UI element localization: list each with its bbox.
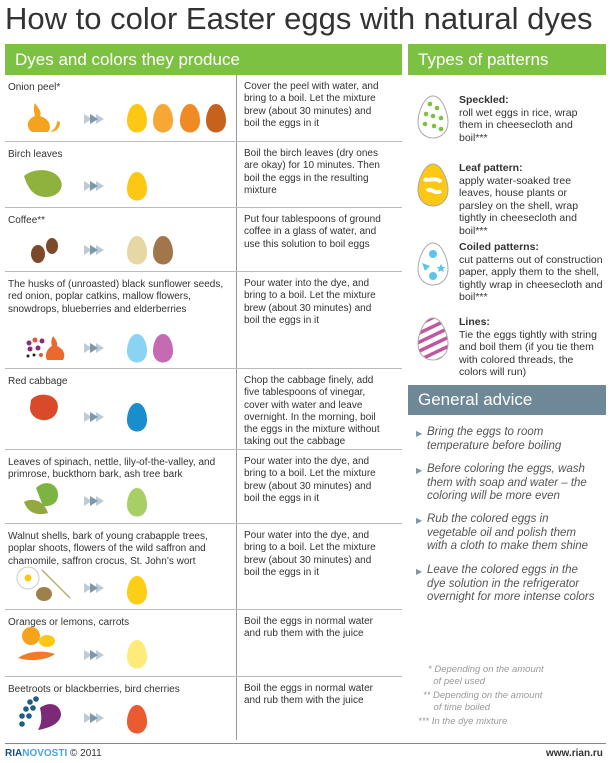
row: red cabbage — [5, 369, 402, 450]
pattern: coiled: Coiled patterns: — [459, 241, 539, 253]
pattern: leaf — [418, 162, 578, 236]
advice 2: ▶ — [416, 466, 422, 475]
row: onion: Onion peel* — [8, 82, 60, 93]
advice 2: Before coloring the eggs, wash them with soap and water – the coloring will be more even — [427, 463, 587, 502]
egg: spinach — [127, 488, 147, 516]
eggs: husks — [127, 334, 173, 362]
footnotes: * Depending on the amount — [428, 664, 544, 675]
pattern: lines — [418, 316, 597, 378]
footnotes: ** Depending on the amount — [423, 690, 542, 701]
row: birch — [5, 142, 402, 208]
advice 4: Leave the colored eggs in the dye solution in the refrigerator overnight for more intense colors — [427, 564, 594, 603]
arrows — [84, 114, 104, 124]
row: walnut: Walnut shells, bark of young crabapple trees, poplar shoots, flowers of the wild saffron and chamomile, saffron crocus, St. John’s wort — [8, 531, 208, 567]
row: red cabbage: Red cabbage — [8, 376, 68, 387]
row: husks — [5, 272, 402, 369]
row: spinach: Leaves of spinach, nettle, lily-of-the-valley, and primrose, buckthorn bark, ash tree bark — [8, 457, 215, 480]
row: red cabbage: Chop the cabbage finely, add five tablespoons of vinegar, cover with water and leave overnight. In the morning, boil the eggs in the mixture without taking out the cabbage — [244, 375, 380, 447]
pattern: coiled — [418, 241, 603, 303]
row: onion — [5, 75, 402, 142]
footnotes: of peel used — [433, 676, 485, 687]
pattern: leaf: Leaf pattern: — [459, 162, 523, 174]
row: spinach: Pour water into the dye, and bring to a boil. Let the mixture brew (about 30 minutes) and boil the eggs in it — [244, 456, 376, 504]
eggs: onion — [127, 104, 226, 132]
advice 3: ▶ — [416, 516, 422, 525]
row: beetroots: Beetroots or blackberries, bird cherries — [8, 684, 180, 695]
egg: red cabbage — [127, 403, 147, 432]
pattern: lines: Lines: — [459, 316, 490, 328]
row: walnut: Pour water into the dye, and bring to a boil. Let the mixture brew (about 30 minutes) and boil the eggs in it — [244, 530, 376, 578]
row: coffee: Coffee** — [8, 215, 45, 226]
footer rule — [5, 743, 606, 744]
icon: oranges & carrot — [18, 627, 55, 660]
advice 1: ▶ — [416, 429, 422, 438]
icon: berries — [26, 336, 64, 360]
advice 3: Rub the colored eggs in vegetable oil and polish them with a cloth to make them shine — [427, 513, 588, 552]
heading: advice: General advice — [418, 390, 532, 409]
icon: spinach — [24, 483, 58, 514]
row: oranges: Boil the eggs in normal water and rub them with the juice — [244, 616, 373, 639]
panel: patterns — [408, 44, 606, 378]
heading: dyes: Dyes and colors they produce — [15, 50, 240, 69]
icon: coffee beans — [31, 238, 58, 263]
row: beetroots — [8, 683, 373, 706]
row: oranges — [5, 610, 402, 677]
icon: onion — [28, 103, 60, 132]
column divider — [236, 75, 237, 740]
row: walnut — [5, 524, 402, 610]
pattern: speckled: Speckled: — [459, 94, 509, 106]
footnotes: of time boiled — [434, 702, 490, 713]
title: How to color Easter eggs with natural dyes — [5, 1, 593, 36]
row: husks: The husks of (unroasted) black sunflower seeds, red onion, poplar catkins, mallow flowers, snowdrops, blueberries and elderberries — [8, 279, 223, 315]
eggs: coffee — [127, 236, 173, 264]
pattern: coiled: cut patterns out of construction paper, apply them to the shell, tightly wrap in cheesecloth and boil*** — [459, 254, 603, 303]
row: onion: Cover the peel with water, and bring to a boil. Let the mixture brew (about 30 minutes) and boil the eggs in it — [244, 81, 379, 129]
advice 1: Bring the eggs to room temperature before boiling — [427, 426, 561, 452]
heading: patterns: Types of patterns — [418, 50, 548, 69]
row: coffee — [5, 208, 402, 272]
heading: advice — [408, 385, 606, 415]
footer: logo: RIANOVOSTI © 2011 — [5, 748, 102, 759]
row: beetroots: Boil the eggs in normal water and rub them with the juice — [244, 683, 373, 706]
egg: birch — [127, 172, 147, 200]
row: birch: Boil the birch leaves (dry ones are okay) for 10 minutes. Then boil the eggs in the resulting mixture — [244, 148, 380, 196]
egg: beetroot — [127, 705, 147, 734]
heading: dyes — [5, 44, 402, 75]
row: spinach — [5, 450, 402, 524]
footnotes — [418, 664, 544, 727]
row: husks: Pour water into the dye, and bring to a boil. Let the mixture brew (about 30 minutes) and boil the eggs in it — [244, 278, 376, 326]
pattern: speckled — [418, 94, 577, 144]
icons and eggs — [16, 103, 226, 734]
icon: birch leaf — [24, 170, 62, 197]
row: birch: Birch leaves — [8, 149, 62, 160]
pattern: lines: Tie the eggs tightly with string and boil them (if you tie them with colored threads, the colors will run) — [459, 328, 597, 378]
row: coffee: Put four tablespoons of ground coffee in a glass of water, and use this solution to boil eggs — [244, 214, 381, 250]
pattern: leaf: apply water-soaked tree leaves, house plants or parsley on the shell, wrap tightly in cheesecloth and boil*** — [459, 174, 578, 236]
icon: beetroot & berries — [19, 696, 61, 730]
icon: chamomile & walnut — [17, 567, 70, 601]
row: oranges: Oranges or lemons, carrots — [8, 617, 129, 628]
heading: patterns — [408, 44, 606, 75]
egg: walnut — [127, 576, 147, 604]
icon: red cabbage — [30, 395, 58, 420]
egg: oranges — [127, 640, 147, 668]
advice 4: ▶ — [416, 567, 422, 576]
pattern: speckled: roll wet eggs in rice, wrap them in cheesecloth and boil*** — [459, 106, 577, 144]
footnotes: *** In the dye mixture — [418, 716, 507, 727]
footer: url: www.rian.ru — [546, 748, 603, 759]
